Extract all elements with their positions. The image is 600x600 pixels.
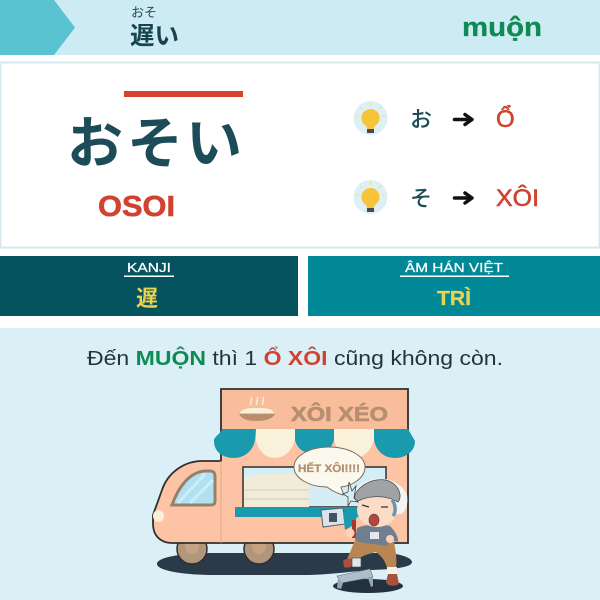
raised shoe	[343, 558, 356, 568]
header band	[0, 0, 600, 55]
header furigana: おそ	[131, 2, 157, 21]
truck body	[153, 389, 408, 543]
hurt burst	[343, 482, 358, 506]
standing shoe	[386, 567, 399, 586]
small box under foot	[352, 558, 361, 567]
service window	[243, 467, 386, 507]
wheels	[177, 534, 274, 564]
reading label: ÂM HÁN VIỆT	[405, 260, 503, 275]
shop name: XÔI XÉO	[291, 402, 388, 426]
kanji label: KANJI	[127, 260, 171, 275]
floor shadow	[333, 579, 403, 593]
panel seam	[220, 461, 222, 543]
sound word: Ổ	[496, 105, 515, 133]
icon: sticky rice bowl	[239, 397, 275, 421]
speech bubble	[294, 447, 365, 495]
sign	[321, 508, 359, 538]
arrow	[454, 114, 472, 124]
counter shelf	[235, 507, 360, 517]
bubble text: HẾT XÔI!!!!	[298, 462, 360, 475]
box upper tint	[222, 390, 407, 429]
panel: sino-vietnamese	[308, 256, 600, 316]
headphones	[392, 500, 395, 516]
pitch accent bar	[124, 91, 243, 97]
sound word: XÔI	[496, 184, 539, 212]
mouth	[369, 514, 379, 526]
mnemonic row 1	[354, 101, 515, 135]
awning	[214, 429, 415, 458]
hands	[346, 528, 394, 543]
kanji value: 遅	[136, 281, 158, 313]
syllable: お	[410, 102, 432, 134]
torso	[355, 525, 398, 546]
arrow	[454, 193, 472, 203]
illustration: shouting boy	[321, 479, 407, 593]
panel: kanji	[0, 256, 298, 316]
hood	[356, 479, 407, 514]
arrow tab	[0, 0, 75, 55]
mnemonic sentence: Đến MUỘN thì 1 Ổ XÔI cũng không còn.	[87, 346, 503, 370]
syllable: そ	[410, 181, 432, 213]
eyes	[362, 505, 388, 507]
cap	[355, 480, 400, 502]
legs	[347, 536, 396, 568]
stool	[337, 569, 373, 589]
reading value: TRÌ	[437, 287, 471, 310]
illustration: food truck	[153, 389, 415, 575]
header meaning: muộn	[462, 12, 542, 42]
icon: light bulb	[354, 101, 388, 135]
panel: illustration background	[0, 328, 600, 600]
header word: 遅い	[130, 17, 179, 52]
big hiragana: おそい	[67, 99, 242, 180]
cab window	[172, 471, 215, 505]
romaji: OSOI	[98, 191, 175, 223]
ground shadow	[157, 553, 412, 575]
mnemonic row 2	[354, 180, 539, 214]
headlight	[153, 510, 164, 522]
icon: light bulb	[354, 180, 388, 214]
face	[357, 493, 397, 527]
panel: word	[0, 62, 600, 248]
shirt logo	[370, 532, 379, 539]
